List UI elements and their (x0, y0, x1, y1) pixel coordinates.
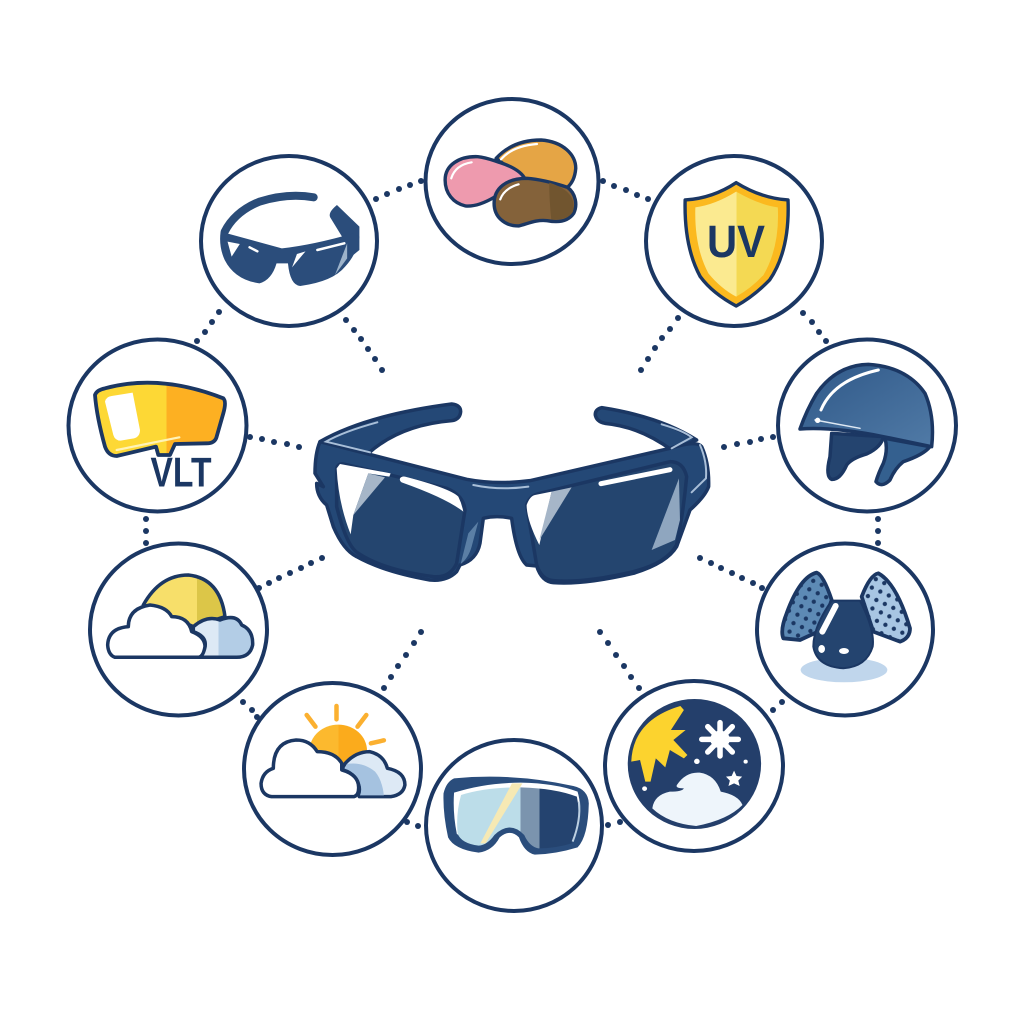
panel: UV protection shield (646, 156, 822, 326)
frame highlights (326, 422, 706, 492)
icon: sun, rays and clouds (261, 706, 405, 797)
panel: sun behind clouds (244, 683, 421, 855)
icon: sun and clouds (108, 575, 253, 657)
icon: small sunglasses (220, 196, 359, 286)
icon: nose piece with vents (782, 573, 910, 682)
panel: helmet (778, 340, 956, 512)
left lens (337, 464, 465, 577)
right lens (527, 462, 687, 581)
icon: helmet (800, 364, 932, 485)
nose pads (461, 522, 478, 564)
central sunglasses (315, 404, 709, 583)
left temple arm (320, 404, 461, 453)
panel: jelly beans lens tints (426, 99, 598, 264)
panel: vented mask (757, 544, 933, 716)
icon: shield (685, 183, 788, 306)
panel: VLT lens (68, 340, 246, 512)
panel: day and night weather (605, 681, 783, 851)
connectors: dotted lines (143, 178, 881, 829)
UV label: UV (707, 216, 765, 267)
right temple arm (595, 408, 697, 450)
icon: goggles (443, 777, 589, 855)
icon: yellow lens (95, 383, 225, 456)
panel: wraparound sunglasses (201, 156, 377, 326)
panel: ski goggles (426, 740, 602, 911)
lens glare (337, 464, 680, 550)
icon: colored beans (445, 140, 576, 226)
panel: partly cloudy (90, 544, 267, 716)
icon: sun, snowflake and cloud (628, 699, 761, 829)
frame (315, 442, 709, 583)
VLT label: VLT (150, 448, 212, 496)
